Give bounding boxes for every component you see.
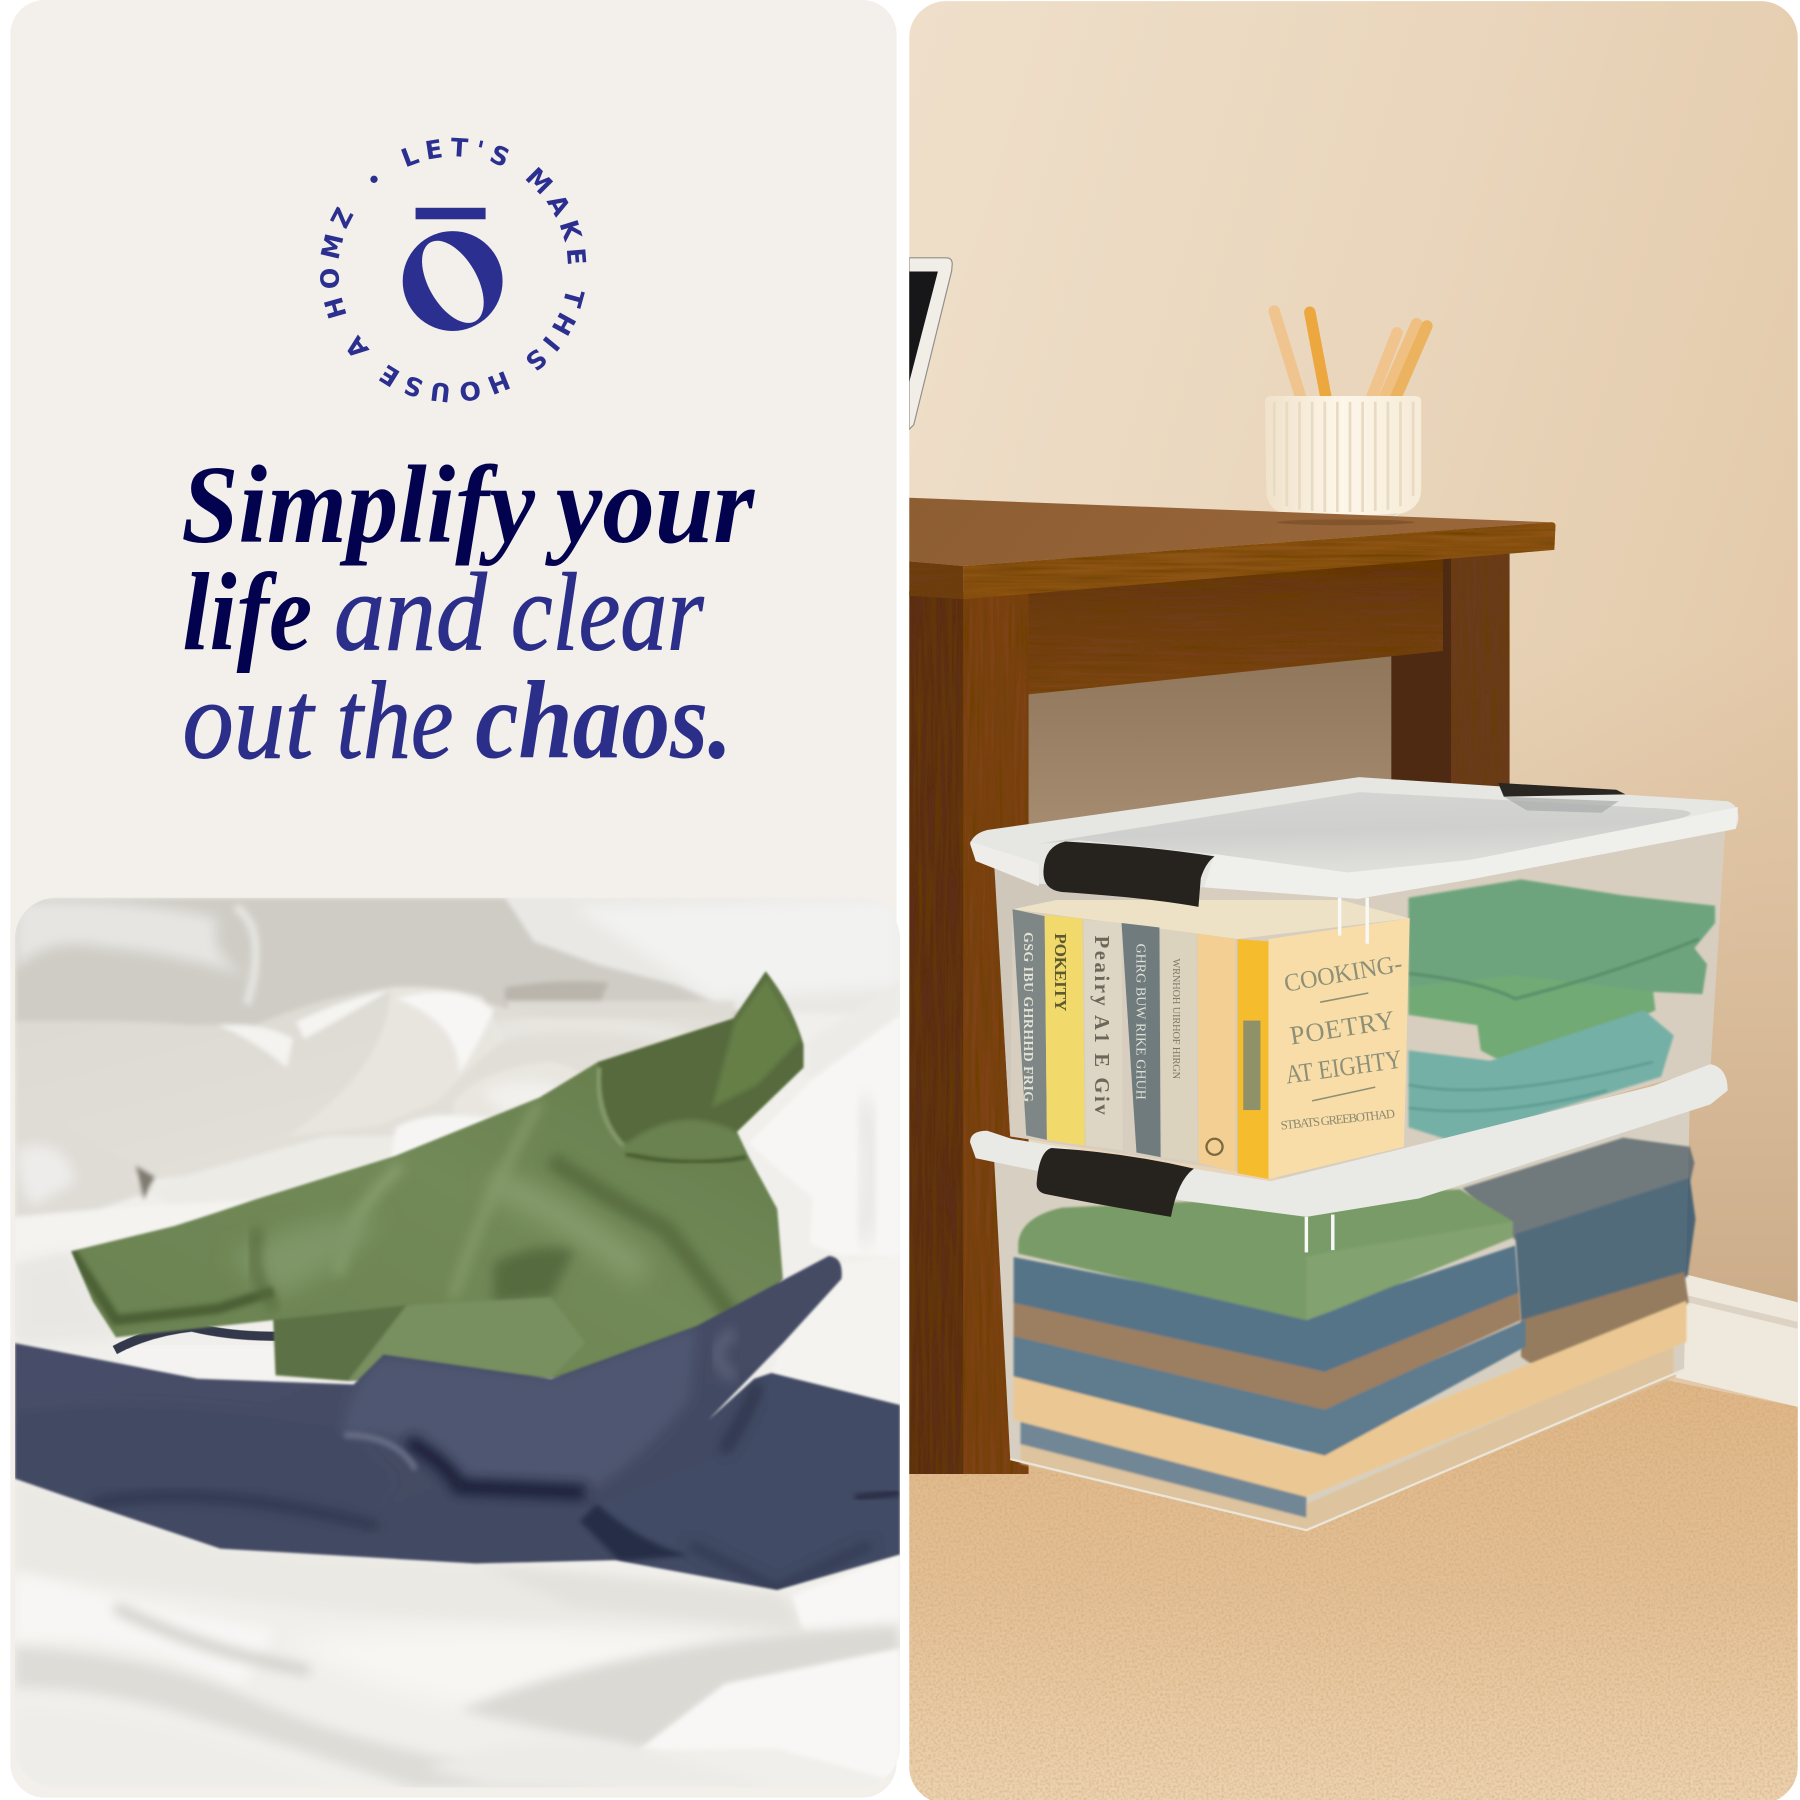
book spine: cream: [1084, 920, 1123, 1150]
lid: clear hangers: [1340, 898, 1367, 944]
headline line 2: [183, 552, 704, 675]
cover title: at eighty: AT EIGHTY: [1284, 1044, 1404, 1090]
stack: brown towel: [1014, 1286, 1521, 1410]
clip: top right latch: [1498, 783, 1626, 797]
desk front edge: [963, 522, 1555, 599]
headline line 1: [181, 444, 756, 567]
headline line 1: Simplify: [181, 444, 535, 567]
book spine: slate: [1122, 923, 1161, 1157]
lower storage bin: [994, 1096, 1696, 1530]
lid: outer rim: [970, 777, 1738, 899]
stack: blue towel 2: [1014, 1320, 1526, 1456]
lid: clear hangers: [1306, 1215, 1333, 1252]
green shirt: folds and shading: [71, 971, 804, 1381]
front leg: [963, 591, 1029, 1474]
lower bin: body: [994, 1096, 1690, 1530]
desk: [909, 498, 1555, 1474]
headline line 2: life: [183, 552, 312, 675]
navy: folds and shading: [15, 1326, 900, 1590]
headline line 3: [183, 660, 732, 783]
cover rule: [1320, 993, 1368, 1002]
book: green spine label: [1243, 1021, 1260, 1110]
book spine: grey: [1012, 909, 1047, 1140]
wall: [909, 0, 1800, 1492]
apron: [1027, 549, 1443, 695]
photo: tidy storage corner: [909, 0, 1800, 1800]
baseboard: [1676, 1272, 1800, 1407]
photo: unmade bed with scattered clothes: [15, 898, 900, 1787]
lid: recessed top: [1039, 792, 1691, 872]
headline line 2: clear: [511, 552, 704, 675]
pencil cup with pencils: [1265, 311, 1427, 520]
book spine: pale: WRNHOH UIRHOF HIRGN: [1170, 959, 1181, 1080]
cup ribs: [1274, 402, 1413, 512]
ceramic cup: [1265, 396, 1421, 520]
book spine: peach: [1197, 933, 1235, 1172]
pencils: [1274, 311, 1427, 397]
floor carpet: [909, 1378, 1800, 1800]
lower bin: edge highlight: [1010, 1370, 1684, 1530]
stack: tan blanket: [1014, 1301, 1686, 1497]
stack: green towel: [1018, 1189, 1513, 1320]
cover title: cooking: COOKING-: [1282, 949, 1404, 998]
stack: blue towel 1: [1014, 1246, 1519, 1372]
book spine: yellow: POKEITY: [1051, 933, 1070, 1012]
lid: reflection: [1504, 797, 1619, 813]
green t-shirt: [71, 971, 804, 1381]
upper bin: lid: [970, 777, 1738, 944]
stack: tan blanket 2: [1021, 1343, 1674, 1529]
logo: macron bar: [416, 208, 486, 219]
upper bin: body: [994, 827, 1725, 1182]
book spine: pale: [1161, 929, 1197, 1162]
headline line 3: the: [336, 660, 453, 783]
book spine: yellow: [1045, 915, 1085, 1146]
desk side edge: [909, 561, 963, 599]
upper storage bin: [994, 827, 1725, 1182]
side leg: [909, 591, 964, 1474]
headline line 3: chaos.: [475, 660, 732, 783]
navy sweatpants: [15, 1256, 900, 1590]
bedding: upper folds and pillows: [15, 898, 898, 1254]
upper bin: teal blanket: [1409, 1010, 1674, 1145]
headline line 1: your: [544, 444, 756, 567]
books: top pages: [1012, 900, 1410, 939]
upper bin: left grey plastic: [994, 863, 1200, 1136]
headline line 3: out: [183, 660, 316, 783]
cover author: STBATS GREEBOTHAD: [1280, 1107, 1396, 1133]
lid: front rim: [1204, 807, 1738, 899]
dark strap under the clothes: [112, 1326, 276, 1354]
desk top surface: [909, 498, 1553, 566]
book: yellow front spine: [1238, 939, 1268, 1179]
lower bin: folded stack: [1014, 1189, 1686, 1529]
logo badge: [320, 138, 586, 402]
lower bin: frosted plastic: [994, 1096, 1690, 1530]
book spine: slate: GHRG BUW RIKE GHUH: [1133, 944, 1148, 1100]
back leg: [1391, 549, 1452, 792]
upper bin: green blanket: [1409, 879, 1715, 1061]
logo: separator dot: [370, 176, 378, 183]
headline line 2: and: [334, 552, 487, 675]
book spine: cream: Peairy A1 E Giv: [1090, 936, 1112, 1115]
book: front cover: [1268, 918, 1410, 1179]
laptop: [909, 258, 952, 429]
cup shadow: [1277, 519, 1414, 525]
logo: letter o: [403, 231, 503, 333]
lower bin: lid: [970, 1064, 1728, 1252]
wall shadow under desk: [1027, 649, 1395, 849]
cup base: [1290, 513, 1398, 520]
headline: [181, 444, 756, 783]
bedding: lower duvet: [15, 1559, 900, 1788]
clip: front lower latch: [1037, 1148, 1194, 1217]
lower bin: right stacks: [1462, 1138, 1696, 1367]
row of books: [1012, 900, 1410, 1179]
logo: circular slogan text: LET'S MAKE THIS HOUSE A HOMZ: [320, 138, 586, 402]
cover rule: [1312, 1087, 1375, 1101]
stack: blue towel 3: [1021, 1414, 1306, 1518]
book spine: grey: GSG IBU GHRHHD FRIG: [1021, 932, 1036, 1102]
wall: lower right shading: [1602, 846, 1798, 1320]
clip: front left latch: [1043, 841, 1215, 907]
cover title: poetry: POETRY: [1288, 1004, 1397, 1051]
bedding base: [898, 998, 900, 1753]
panel: left cream card: [10, 0, 897, 1798]
